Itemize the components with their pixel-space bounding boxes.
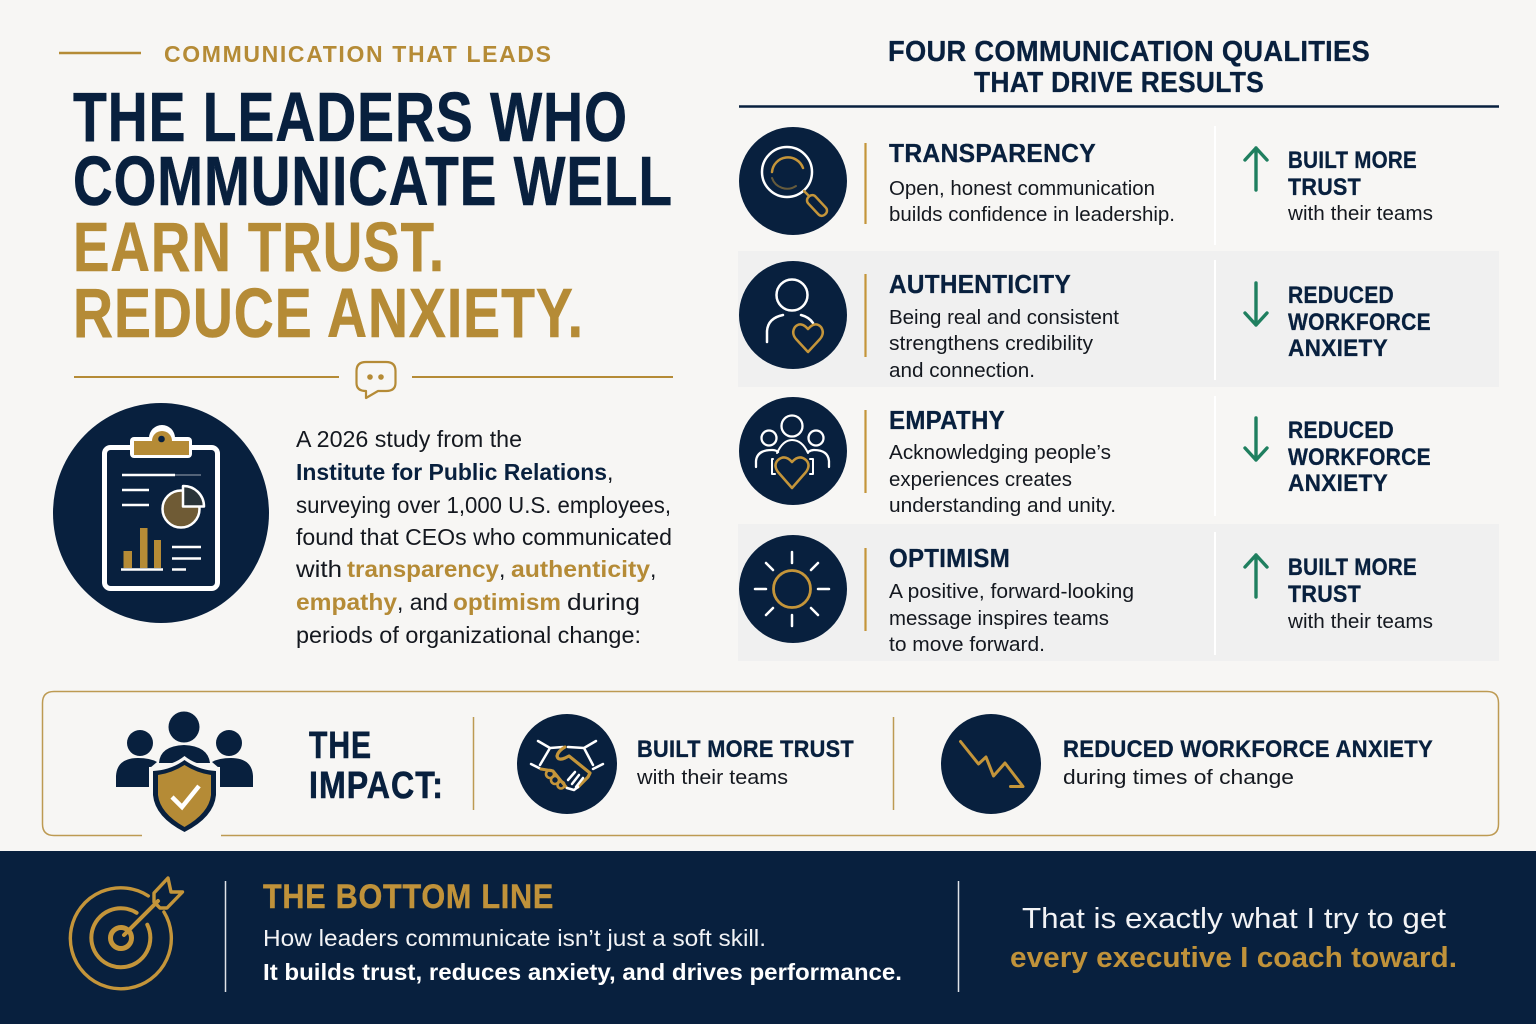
panel: the impact: during times of change <box>1063 766 1294 789</box>
study intro paragraph: with <box>295 556 342 582</box>
row: optimism: to move forward. <box>889 633 1045 656</box>
icon: magnifying glass <box>739 127 847 235</box>
row: authenticity: Being real and consistent <box>889 306 1119 329</box>
icon: group with heart <box>739 397 847 505</box>
bottom line text <box>263 878 902 985</box>
bottom line text: How leaders communicate isn’t just a soft skill. <box>263 925 766 951</box>
row: transparency: TRUST <box>1288 174 1361 201</box>
row: authenticity: WORKFORCE <box>1288 309 1431 336</box>
main title: EARN TRUST. <box>73 208 445 286</box>
row: optimism <box>738 524 1499 661</box>
icon: person with heart <box>739 261 847 369</box>
row: empathy <box>738 388 1499 523</box>
main title <box>73 78 673 352</box>
impact label <box>309 725 444 807</box>
closing statement: every executive I coach toward. <box>1010 942 1457 974</box>
study intro paragraph: , and <box>397 589 448 615</box>
icon: team with shield <box>116 712 253 836</box>
main title: COMMUNICATE WELL <box>73 142 673 220</box>
panel: the impact <box>42 692 1498 836</box>
row: authenticity: AUTHENTICITY <box>889 269 1071 299</box>
row: empathy: EMPATHY <box>889 405 1005 435</box>
qualities heading: FOUR COMMUNICATION QUALITIES <box>888 36 1370 68</box>
row: authenticity: REDUCED <box>1288 282 1394 309</box>
row: transparency: TRANSPARENCY <box>889 138 1096 168</box>
study intro paragraph: , <box>607 459 613 485</box>
study intro paragraph: found that CEOs who communicated <box>296 524 672 550</box>
study intro paragraph <box>295 426 672 648</box>
row: optimism: message inspires teams <box>889 607 1109 630</box>
qualities heading: THAT DRIVE RESULTS <box>974 67 1264 99</box>
icon: sun <box>739 535 847 643</box>
row: transparency: Open, honest communication <box>889 177 1155 200</box>
row: optimism: OPTIMISM <box>889 543 1010 573</box>
qualities heading <box>739 36 1499 106</box>
study intro paragraph: during <box>567 589 640 615</box>
study intro paragraph: optimism <box>453 589 561 615</box>
arrow down <box>1245 418 1267 460</box>
row: optimism: TRUST <box>1288 581 1361 608</box>
panel: the impact: BUILT MORE TRUST <box>637 736 854 763</box>
row: transparency: builds confidence in leadership. <box>889 203 1175 226</box>
row: transparency <box>738 120 1499 250</box>
arrow up <box>1245 148 1267 190</box>
impact label: THE <box>309 725 372 767</box>
panel: bottom line banner <box>0 851 1536 1024</box>
main title: THE LEADERS WHO <box>73 78 628 156</box>
study intro paragraph: A 2026 study from the <box>296 426 522 452</box>
row: transparency: with their teams <box>1287 203 1433 225</box>
icon: clipboard report <box>53 403 269 623</box>
arrow down <box>1245 283 1267 325</box>
row: optimism: A positive, forward-looking <box>889 580 1134 603</box>
closing statement: That is exactly what I try to get <box>1022 903 1446 935</box>
row: authenticity: and connection. <box>889 359 1035 382</box>
panel: the impact: REDUCED WORKFORCE ANXIETY <box>1063 736 1433 763</box>
row: optimism: with their teams <box>1287 611 1433 633</box>
main title: REDUCE ANXIETY. <box>73 274 584 352</box>
eyebrow heading: COMMUNICATION THAT LEADS <box>164 41 551 67</box>
bottom line text: It builds trust, reduces anxiety, and drives performance. <box>263 959 902 985</box>
study intro paragraph: , <box>499 556 505 582</box>
row: authenticity <box>738 251 1499 387</box>
row: empathy: ANXIETY <box>1288 470 1388 497</box>
divider with speech bubble icon <box>74 362 673 398</box>
row: empathy: Acknowledging people’s <box>889 441 1111 464</box>
bottom line text: THE BOTTOM LINE <box>263 878 554 916</box>
panel: the impact: with their teams <box>636 766 788 789</box>
study intro paragraph: authenticity <box>511 556 650 582</box>
row: empathy: WORKFORCE <box>1288 444 1431 471</box>
study intro paragraph: Institute for Public Relations <box>296 459 607 485</box>
row: optimism: BUILT MORE <box>1288 554 1417 581</box>
row: authenticity: strengthens credibility <box>889 332 1094 355</box>
row: empathy: REDUCED <box>1288 417 1394 444</box>
study intro paragraph: periods of organizational change: <box>296 622 641 648</box>
closing statement <box>1010 903 1457 974</box>
impact label: IMPACT: <box>309 765 444 807</box>
row: empathy: experiences creates <box>889 468 1072 491</box>
study intro paragraph: empathy <box>296 589 397 615</box>
icon: declining chart <box>941 714 1041 814</box>
row: empathy: understanding and unity. <box>889 494 1116 517</box>
study intro paragraph: , <box>650 556 656 582</box>
row: authenticity: ANXIETY <box>1288 335 1388 362</box>
icon: target with arrow <box>70 878 182 989</box>
icon: handshake <box>517 714 617 814</box>
study intro paragraph: surveying over 1,000 U.S. employees, <box>296 492 671 518</box>
row: transparency: BUILT MORE <box>1288 147 1417 174</box>
arrow up <box>1245 555 1267 597</box>
study intro paragraph: transparency <box>347 556 499 582</box>
